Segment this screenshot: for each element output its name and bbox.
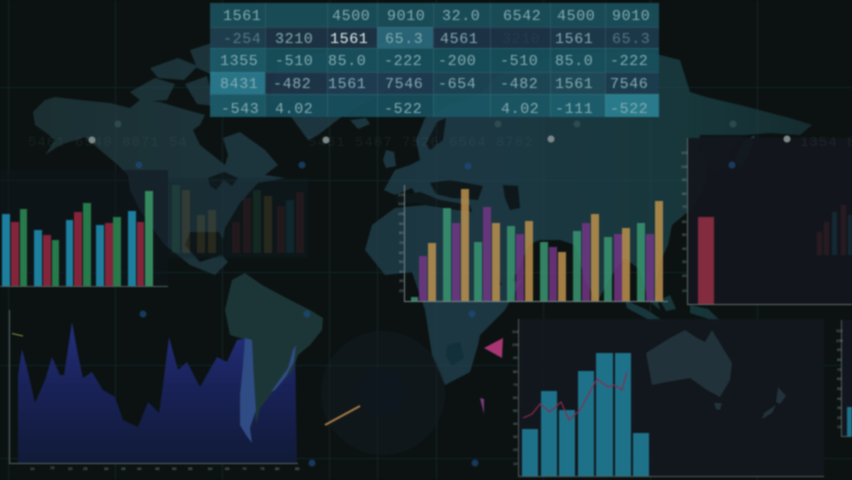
bar chart: far right (836, 320, 852, 436)
bottom-right y labels: 100 (512, 342, 519, 347)
centre chart y labels: 90 (399, 221, 404, 226)
right chart y labels: 60 (682, 219, 687, 224)
centre chart y labels (398, 192, 405, 293)
table numbers: 1561 (330, 31, 368, 48)
South America west overlap (240, 338, 256, 443)
land: Greenland (270, 40, 420, 140)
centre chart axes (404, 185, 668, 302)
table numbers: 3210 (275, 31, 313, 48)
table numbers: 6542 (503, 8, 541, 25)
area chart x labels: 25 (83, 466, 88, 471)
bottom-right y labels: 80 (513, 369, 518, 374)
far right y labels: 50 (837, 386, 842, 391)
table numbers: 65.3 (612, 31, 650, 48)
area chart x labels: 40 (137, 466, 142, 471)
faint ghost numbers: 5461 5487 7526 6564 8782 (308, 135, 534, 151)
area chart x labels: 55 (188, 466, 193, 471)
far right y labels: 110 (836, 328, 843, 333)
bottom-right y labels: 110 (512, 329, 519, 334)
bottom-right y labels: 50 (513, 408, 518, 413)
land: Kamchatka patch (735, 135, 755, 168)
area series (18, 322, 297, 463)
table numbers: 1561 (328, 76, 366, 93)
centre chart y labels: 40 (399, 269, 404, 274)
area chart x labels: 85 (295, 466, 300, 471)
bottom-right y labels: 70 (513, 382, 518, 387)
sea: Mediterranean (395, 192, 472, 212)
ghost bar chart (172, 185, 304, 253)
land: Tasmania (714, 403, 722, 410)
table numbers: -222 (610, 53, 648, 70)
table numbers: 85.0 (328, 53, 366, 70)
map seas (208, 118, 745, 366)
table numbers: -522 (384, 101, 422, 118)
data table (210, 3, 659, 118)
panel: right bar chart backdrop (687, 138, 852, 305)
area chart x labels: 70 (242, 466, 247, 471)
right chart y labels: 20 (682, 273, 687, 278)
pink triangle (484, 338, 503, 358)
area chart axes (10, 310, 298, 464)
area chart x labels: 35 (121, 466, 126, 471)
sea: Caspian Sea (503, 185, 520, 210)
area chart x labels: 50 (172, 466, 177, 471)
table numbers: 4500 (557, 8, 595, 25)
area chart x labels (30, 465, 300, 471)
panel: top-left bar chart backdrop (0, 170, 168, 286)
far right axes (842, 320, 852, 436)
land: Africa (365, 205, 522, 385)
right chart y labels (681, 150, 688, 293)
centre chart y labels: 50 (399, 259, 404, 264)
sea: Black Sea (430, 180, 483, 200)
right chart axes (688, 138, 852, 304)
bottom-right y labels: 10 (513, 461, 518, 466)
right chart y labels: 90 (682, 177, 687, 182)
far right y labels: 30 (837, 405, 842, 410)
right chart y labels: 100 (681, 164, 688, 169)
left chart baseline (0, 286, 168, 288)
right chart y labels: 70 (682, 204, 687, 209)
bottom-right y labels: 90 (513, 355, 518, 360)
centre chart y labels: 110 (398, 201, 405, 206)
bar chart: left (0, 191, 168, 286)
right chart y labels: 50 (682, 232, 687, 237)
far right y labels (836, 328, 843, 429)
centre chart y labels: 120 (398, 192, 405, 197)
area chart x labels: 20 (68, 466, 73, 471)
area chart x labels: 15 (50, 465, 55, 470)
table numbers: 8431 (220, 76, 258, 93)
far right y labels: 100 (836, 338, 843, 343)
table numbers: -254 (223, 31, 261, 48)
table numbers: -543 (221, 101, 259, 118)
data nodes (88, 120, 790, 466)
pink shard (480, 398, 484, 414)
table numbers: 7546 (610, 76, 648, 93)
land: New Zealand (762, 387, 786, 419)
faint ghost numbers: 5461 6548 8871 54 (28, 135, 188, 151)
area chart x labels: 65 (225, 466, 230, 471)
table numbers: 32.0 (442, 8, 480, 25)
far right y labels: 90 (837, 347, 842, 352)
sea: Baltic (426, 118, 446, 150)
yellow trace (12, 334, 23, 336)
area chart x labels: 30 (104, 466, 109, 471)
bottom-right y labels: 60 (513, 395, 518, 400)
area chart (10, 273, 323, 471)
bottom-right y labels: 40 (513, 421, 518, 426)
table numbers: -482 (273, 76, 311, 93)
panel: far right chart backdrop (841, 320, 852, 436)
table numbers: 1561 (555, 76, 593, 93)
land: South America (225, 273, 323, 425)
red trend line (523, 372, 627, 420)
far right y labels: 10 (837, 424, 842, 429)
right chart y labels: 40 (682, 246, 687, 251)
radar circle (321, 331, 445, 455)
table numbers (220, 8, 650, 118)
table numbers: 4.02 (501, 101, 539, 118)
table numbers: 9010 (612, 8, 650, 25)
centre chart y labels: 80 (399, 230, 404, 235)
land: Arctic islands (130, 42, 215, 106)
table numbers: 1561 (223, 8, 261, 25)
table numbers: -510 (500, 53, 538, 70)
far right y labels: 40 (837, 396, 842, 401)
land: North America (33, 97, 285, 275)
bottom-right y labels: 20 (513, 447, 518, 452)
far right y labels: 80 (837, 357, 842, 362)
centre chart y labels: 30 (399, 278, 404, 283)
centre chart y labels: 60 (399, 250, 404, 255)
centre chart y labels: 70 (399, 240, 404, 245)
table numbers: 85.0 (555, 53, 593, 70)
panel: ghost chart haze (168, 178, 308, 258)
table numbers: -654 (438, 76, 476, 93)
panel: bottom-right chart backdrop (518, 319, 824, 476)
table numbers: -111 (555, 101, 593, 118)
right chart y labels: 80 (682, 191, 687, 196)
bottom-right axes (518, 319, 824, 476)
land: Australia (646, 330, 732, 397)
land: Eurasia (384, 50, 812, 310)
bottom-right y labels (512, 329, 519, 466)
bar chart: right (681, 138, 852, 304)
far right y labels: 20 (837, 415, 842, 420)
area chart x labels: 80 (275, 466, 280, 471)
bar chart: centre (398, 185, 668, 302)
table numbers: 65.3 (385, 31, 423, 48)
right chart y labels: 30 (682, 259, 687, 264)
ghost bar chart right (817, 205, 852, 255)
table numbers: 7546 (385, 76, 423, 93)
area chart x labels: 75 (260, 466, 265, 471)
South America east overlap (271, 345, 296, 392)
table numbers: 4561 (440, 31, 478, 48)
far right y labels: 70 (837, 367, 842, 372)
table numbers: -482 (500, 76, 538, 93)
table numbers: -522 (610, 101, 648, 118)
area chart x labels: 60 (208, 466, 213, 471)
land: British Isles and Iceland (350, 118, 396, 168)
table numbers: 9010 (387, 8, 425, 25)
centre chart y labels: 20 (399, 288, 404, 293)
far right y labels: 60 (837, 376, 842, 381)
right chart y labels: 110 (681, 150, 688, 155)
orange needle (325, 406, 360, 425)
area chart x labels: 45 (155, 466, 160, 471)
table numbers: 4500 (332, 8, 370, 25)
area chart x labels: 10 (30, 466, 35, 471)
centre chart y labels: 100 (398, 211, 405, 216)
table numbers: 4.02 (275, 101, 313, 118)
faint ghost numbers (28, 135, 852, 151)
table numbers: 1355 (220, 53, 258, 70)
table rules (210, 3, 659, 117)
table numbers: 1561 (555, 31, 593, 48)
table numbers: -222 (384, 53, 422, 70)
sea: Okhotsk dark (700, 136, 745, 172)
sea: Africa lake patch (446, 342, 464, 366)
land: islands of Southeast Asia (625, 295, 726, 326)
table numbers: 3210 (502, 31, 540, 48)
right chart y labels: 10 (682, 288, 687, 293)
bar and line chart: bottom right (512, 319, 824, 476)
table cell fills (210, 3, 659, 117)
world map (33, 40, 812, 385)
bottom-right y labels: 30 (513, 434, 518, 439)
table numbers: -200 (438, 53, 476, 70)
table numbers: -510 (275, 53, 313, 70)
sea: Great Lakes (208, 172, 238, 190)
